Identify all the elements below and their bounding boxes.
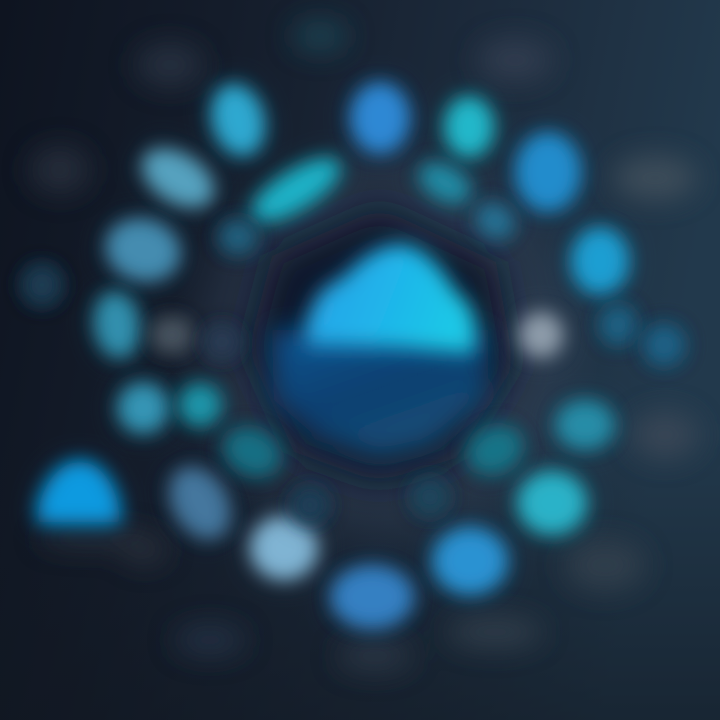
node top left — [206, 80, 270, 160]
node lower left b — [180, 385, 220, 425]
dim node left inner — [205, 325, 239, 359]
small pill right — [414, 157, 476, 209]
long diagonal pill — [245, 149, 347, 231]
small cloud icon lower left — [38, 462, 120, 522]
node left upper — [101, 213, 185, 287]
node right lower — [557, 402, 613, 448]
small node right a — [601, 306, 635, 344]
grey node left — [152, 318, 192, 352]
node bottom right — [434, 529, 506, 593]
dim node far left — [22, 264, 62, 306]
node lower pill — [160, 458, 240, 548]
node upper right — [517, 134, 579, 210]
small node right b — [645, 326, 683, 364]
small link right — [471, 198, 519, 244]
cloud upper half — [305, 244, 476, 354]
small link left — [220, 221, 256, 253]
ring of blue nodes — [22, 80, 683, 627]
node upper left pill — [134, 139, 222, 217]
node top right — [446, 98, 492, 156]
hexagon dark ring — [248, 208, 514, 482]
node top centre — [352, 84, 408, 152]
node lower right — [519, 473, 585, 533]
central hexagon icon — [248, 208, 514, 482]
grey node right — [521, 314, 561, 356]
node bottom centre — [332, 567, 412, 627]
node lower left a — [119, 384, 167, 432]
dim node bottom inner — [412, 479, 448, 515]
node left — [92, 290, 142, 360]
node lower left c — [218, 421, 286, 483]
hexagon lower half — [272, 330, 488, 458]
node bottom left pale — [252, 518, 316, 578]
dim node bottom inner left — [292, 487, 328, 523]
node inner lower right — [462, 420, 528, 480]
node right — [573, 229, 627, 293]
central haze — [170, 130, 600, 560]
